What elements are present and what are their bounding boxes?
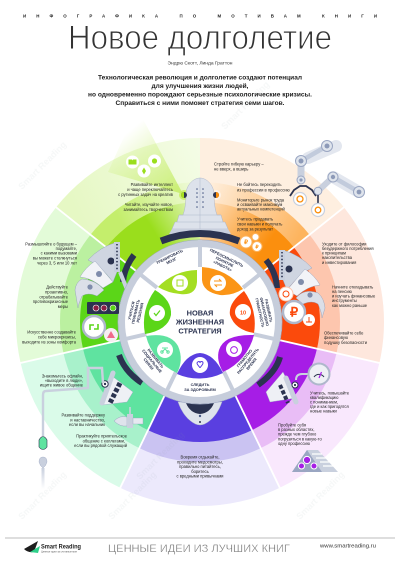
petal: social [146,335,181,373]
footer logo [24,541,40,553]
robot top head [169,178,231,234]
wedge text: lime: занимайтесь творчеством [123,207,173,212]
hub disc [122,244,278,400]
wedge text: red: и инвестирования [322,260,356,265]
wedge text: teal: ищите живое общение [40,382,84,388]
footer brand: Ценные идеи за считаные мин [41,550,78,554]
wedge text: teal: общение с коллегами, [83,438,125,444]
hub labels: ГРАМОТНОСТЬ [254,298,266,328]
intro text: для улучшения жизни людей, [152,83,249,90]
wedge text: purple: погрузиться в какую-то [278,436,322,442]
wedge text: bright green: вы можете столкнуться [33,256,77,260]
hub spokes [120,240,280,396]
wedge text: indigo [177,454,223,478]
wedge text: red: Начните откладывать [332,284,373,290]
wedge text: purple: где и как пригодятся [310,404,349,409]
wedge text: lime: и чаще переключайтесь [127,187,173,192]
wedge text: teal: Знакомьтесь офлайн, [42,374,83,378]
wedge text: bright green [22,242,78,344]
wedge text: purple [278,390,350,446]
wedge text: teal: «выходите в люди», [45,378,83,383]
watermarks: Smart Reading [134,429,186,481]
petal: finance [230,291,255,333]
central hub [118,240,282,404]
footer brand [41,544,81,554]
wedge text: purple: с пониманием, [310,400,338,404]
hub title: НОВАЯ [187,308,213,318]
watermarks: Smart Reading [294,469,346,521]
wedge dividers [19,207,381,490]
watermarks: Smart Reading [219,79,271,131]
hub outline [118,240,282,404]
wedge text: orange: доход за результат [237,226,273,232]
hub labels: СВЯЗИ [142,357,155,371]
hub labels: РАЗВИВАТЬ [146,348,165,369]
wedge text: purple: в разных областях, [278,427,315,432]
petal icons [149,275,251,373]
wedge text: red: подушку безопасности [324,340,367,345]
wedge text: teal: если вы рядовой служащий [74,443,127,448]
pipe stack [292,450,338,472]
footer url: www.smartreading.ru [319,544,376,550]
wedge text: orange: не вверх, а вширь [214,166,248,172]
orange coins: ₽ [244,239,248,246]
icons: lime brain trio [126,154,161,178]
orange coins [240,234,262,252]
robot right claws [266,250,325,318]
wedge text: lime: Читайте, изучайте новое, [125,202,173,207]
hub labels: МОЗГ [165,256,178,265]
wedge text: red: финансовую [324,335,348,340]
gauge with pipe [296,364,330,384]
wedge text: red: Уходите от философии [322,242,366,246]
wedge text: orange: актуальных компетенций [237,206,285,212]
petal: decisions [144,290,171,334]
wedge text: teal: и наставничество, [70,418,105,422]
wedge text: orange: Не бойтесь переходить [237,182,282,187]
hub title: СТРАТЕГИЯ [178,326,222,336]
wedge text: lime: с рутинных задач на креатив [118,192,173,197]
wedge text: bright green: Действуйте [46,284,69,290]
wedge text: bright green: Искусственно создавайте [27,330,77,334]
watermarks [16,79,346,521]
hub labels: ПОНЯТИЕ [215,255,235,268]
wedge text: purple: квалификацию [310,395,338,400]
hub labels: РАСПРЕДЕЛЯТЬ [236,347,260,375]
hub labels: РЕШЕНИЯ [135,302,145,323]
wedge text: purple: прежде чем глубоко [278,432,317,436]
wedge: indigo [120,322,280,506]
hub labels: ГРАМОТНО [236,348,253,368]
wedge text: orange [214,162,290,232]
footer rule [5,537,395,539]
watermarks: Smart Reading [16,469,68,521]
hub labels: ПЕРЕОСМЫСЛИТЬ [209,247,244,268]
top collar [161,234,239,241]
wedge text: bright green: подумайте, [56,246,77,251]
wedge text: bright green: с какими вызовами [41,250,77,256]
wedge text: teal: если вы начальник [69,422,105,427]
hub labels: ЗА ЗДОРОВЬЕМ [184,387,216,392]
petal: work [202,267,243,295]
wedge: red [200,207,384,363]
intro text: Справиться с ними поможет стратегия семи шагов. [116,101,285,107]
traffic light device [87,302,119,314]
hub labels: ВРЕМЯ [245,357,258,371]
hub labels: СОЦИАЛЬНЫЕ [141,348,163,374]
orange coins: ₽ [255,244,259,250]
wedge text: orange: Мониторьте рынок труда [237,198,285,202]
hub labels: ТРЕНИРОВАТЬ [155,248,184,265]
wedge text: teal: Практикуйте приятельское [76,434,128,438]
wedge: lime [56,108,200,322]
wedge text: indigo: правильно питайтесь, [179,464,221,469]
intro text [88,76,312,107]
watermarks: Smart Reading [16,139,68,191]
petal icon glyphs [154,279,237,368]
petal: health [177,353,223,379]
wedge text: bright green: проактивно, [45,290,68,294]
finance icon text: 10 [240,310,246,316]
authors: Эндрю Скотт, Линда Граттон [168,60,233,66]
hub labels [126,247,275,392]
wedge: purple [200,322,379,488]
wedge: orange [200,138,344,322]
hub labels: СЛЕДИТЬ [191,382,210,387]
wedge text: red: как можно раньше [332,303,368,308]
petal: time [218,335,254,372]
wedge text: red: инструменты [332,298,357,303]
intro text: Технологическая революция и долголетие создают потенциал [98,76,302,82]
wedge text: indigo: Вовремя отдыхайте, [181,454,219,460]
wedge text: teal [40,374,128,448]
hub title: ЖИЗНЕННАЯ [175,318,224,326]
hub labels: ФИНАНСОВУЮ [259,297,270,327]
hub labels: «РАБОТА» [213,259,233,272]
wedge text: bright green: выходите из зоны комфорта [22,340,77,344]
robot arm 2 with claw [312,172,364,216]
wedge text: red: накопительства [322,255,353,260]
title: Новое долголетие [68,19,332,57]
wedge text: bright green: противокризисные [33,299,69,304]
finance icons: ₽ [290,304,299,320]
wedge text: orange: Учитесь продавать [237,216,273,222]
icon: warning [104,328,118,342]
wedge text: lime: Развивайте интеллект [131,182,173,187]
icon: crisis circle [83,316,105,338]
header label: ИНФОГРАФИКА ПО МОТИВАМ КНИГИ [23,14,377,18]
finance icons [279,287,315,326]
wedge text: bright green: меры [58,304,68,309]
wedge text: red: к принципам [322,250,346,256]
wedge: bright green [16,207,200,363]
wedge text: orange: свои навыки и получать [237,222,282,226]
robot arm 1 with claw [290,140,336,206]
wedge text: purple: Пробуйте себя [278,422,306,428]
wedge text: orange: Стройте гибкую карьеру – [214,162,264,166]
footer brand: Smart Reading [41,544,81,550]
wedge text: red: на пенсию [332,289,352,294]
strategy wheel: outer wedges [16,108,384,506]
footer slogan: ЦЕННЫЕ ИДЕИ ИЗ ЛУЧШИХ КНИГ [108,543,290,555]
hub labels: ПРИНИМАТЬ [130,299,141,324]
wedge text: purple: Учитесь, повышайте [310,390,350,396]
watermarks: Smart Reading [106,469,158,521]
hub labels: РАЗВИВАТЬ [264,299,274,323]
intro text: но одновременно порождают серьезные психологические кризисы. [88,92,312,98]
wedge text: purple: одну профессию [278,441,310,446]
wedge text: red: безудержного потребления [322,246,374,251]
small robot [114,407,143,428]
wedge: teal [21,322,200,488]
wedge text: purple: новые навыки [310,408,337,414]
wedge text: bright green: Размышляйте о будущем – [25,242,78,246]
wedge text: orange: из профессии в профессию [237,188,290,192]
wedge text: indigo: с вредными привычками [177,474,223,478]
wedge text: indigo: боритесь [191,469,209,474]
wedge text: red: Обеспечивайте себе [324,330,364,336]
wedge text: lime [118,182,173,212]
wedge text: red: и изучать финансовые [332,294,376,298]
cable with plugs [39,368,103,489]
wedge text: orange: и осваивайте максимум [237,202,282,207]
hub title [175,308,224,336]
robot bottom head [178,402,222,425]
wedge text: teal: Развивайте поддержку [62,412,106,418]
robot lower left claw [102,355,142,405]
petal: brain [158,270,197,294]
wedge text: indigo: проходите медосмотры, [177,460,223,464]
robot lower right claw [258,357,298,403]
wedge text: bright green: себе микрокризисы, [38,334,76,340]
wedge text: bright green: отрабатывайте [39,294,69,300]
hub labels: УЧИТЬСЯ [127,301,136,320]
wedge text: bright green: через 3, 5 или 10 лет [37,260,77,266]
wedge text: red [322,242,376,345]
robot left claws [75,242,134,308]
